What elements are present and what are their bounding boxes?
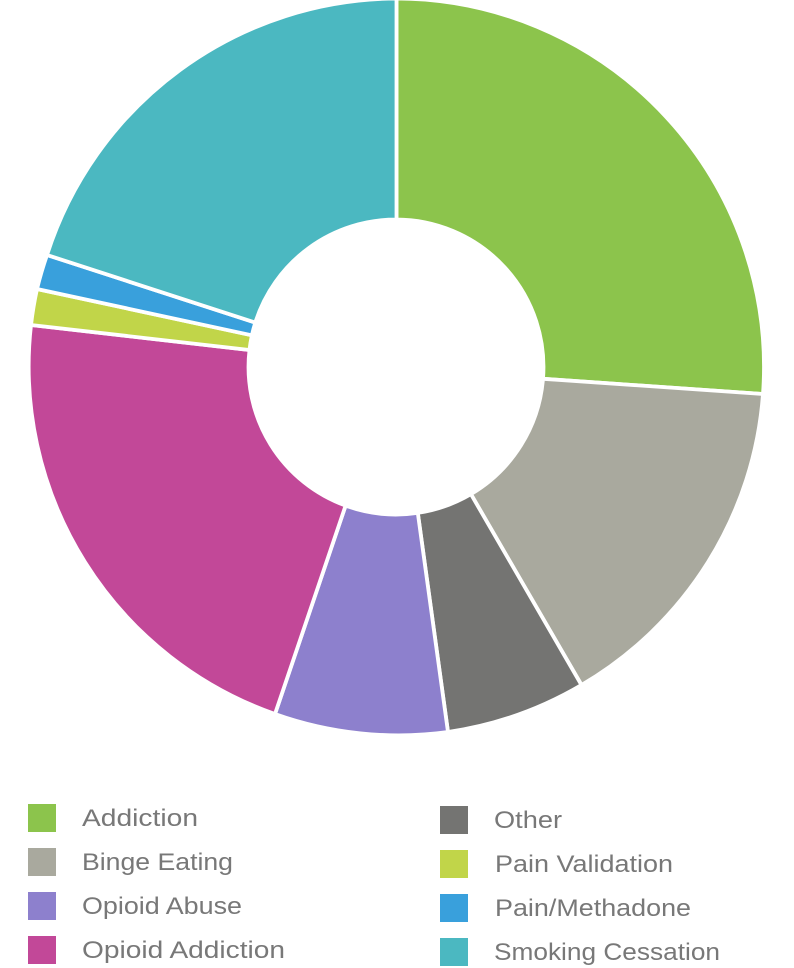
- slice: Binge Eating: [471, 379, 763, 685]
- legend item: Pain Validation: [440, 850, 673, 878]
- slice: Addiction: [396, 0, 764, 394]
- slice: Pain/Methadone: [37, 255, 255, 335]
- legend item: Opioid Addiction: Opioid Addiction: [82, 937, 285, 964]
- legend item: Opioid Addiction: [28, 936, 285, 964]
- slice: Opioid Abuse: [275, 506, 448, 735]
- legend item: Pain/Methadone: [440, 894, 691, 922]
- legend: [28, 804, 720, 966]
- legend item: Binge Eating: Binge Eating: [82, 849, 233, 876]
- legend item: Addiction: [28, 804, 198, 832]
- legend item: Addiction: Addiction: [82, 805, 198, 832]
- slice: Other: [418, 494, 582, 732]
- legend item: Other: Other: [494, 807, 562, 834]
- slice: Smoking Cessation: [47, 0, 396, 323]
- legend item: Smoking Cessation: Smoking Cessation: [494, 939, 720, 966]
- slice: Opioid Addiction: [29, 325, 346, 714]
- slice: Pain Validation: [31, 289, 252, 350]
- legend item: Other: [440, 806, 562, 834]
- donut chart: [29, 0, 764, 735]
- legend item: Opioid Abuse: Opioid Abuse: [82, 893, 242, 920]
- legend item: Opioid Abuse: [28, 892, 242, 920]
- legend item: Pain Validation: Pain Validation: [495, 851, 673, 878]
- legend item: Binge Eating: [28, 848, 233, 876]
- legend item: Pain/Methadone: Pain/Methadone: [495, 895, 691, 922]
